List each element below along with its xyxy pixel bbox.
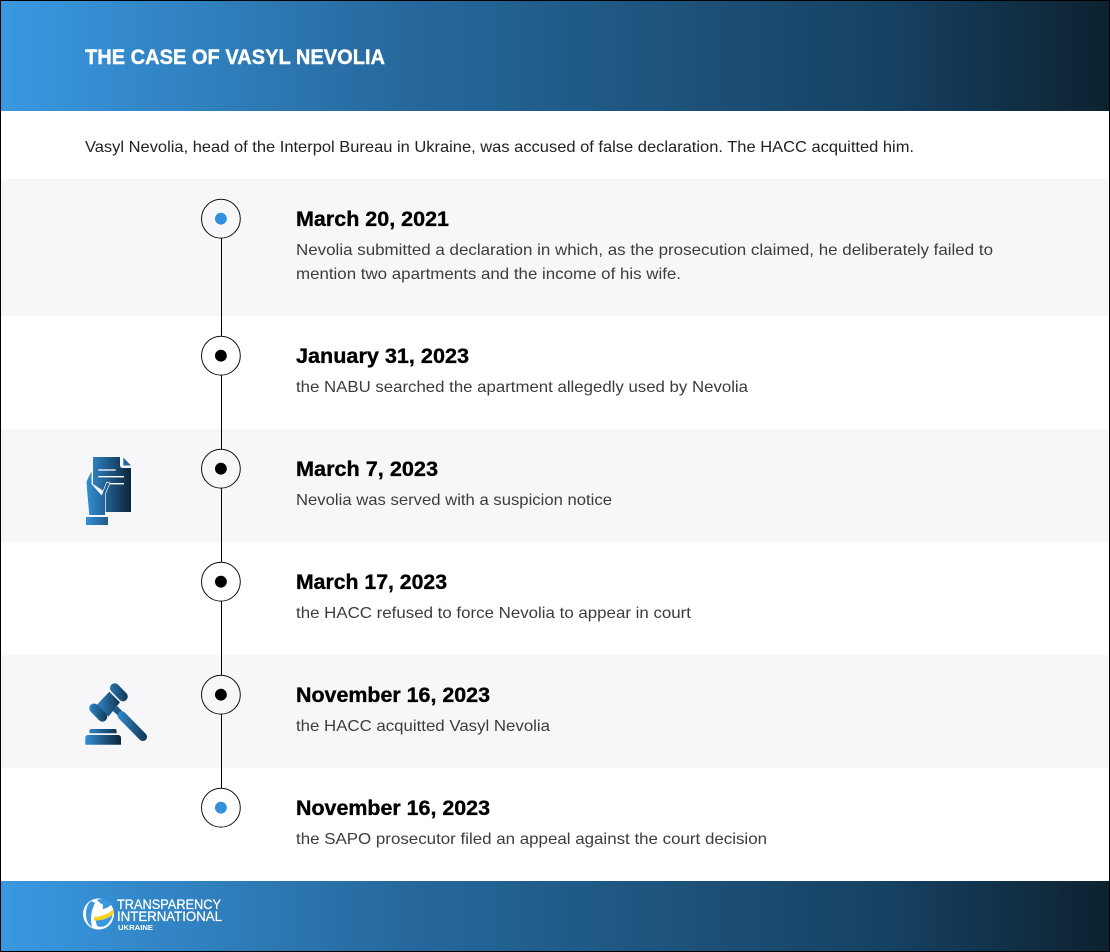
timeline marker 1	[202, 199, 240, 238]
event: November 16, 2023 appeal: November 16, 2023	[296, 797, 490, 820]
event: March 17, 2023: the HACC refused to force Nevolia to appear in court	[296, 605, 692, 622]
event: March 7, 2023: March 7, 2023	[296, 458, 438, 481]
logo: Transparency International Ukraine: UKRAINE	[118, 923, 153, 932]
event: March 20, 2021: March 20, 2021	[296, 208, 449, 231]
timeline marker 4	[202, 562, 240, 601]
event: November 16, 2023 appeal	[296, 797, 767, 848]
row background: November 16, 2023	[1, 655, 1109, 768]
icon: gavel	[85, 688, 143, 745]
event: March 17, 2023	[296, 571, 692, 622]
event: March 7, 2023: Nevolia was served with a suspicion notice	[296, 492, 612, 509]
event: November 16, 2023 acquittal: the HACC acquitted Vasyl Nevolia	[296, 718, 550, 735]
logo: Transparency International Ukraine	[83, 897, 222, 932]
timeline marker 6	[202, 788, 240, 827]
event: January 31, 2023: January 31, 2023	[296, 345, 469, 368]
event: November 16, 2023 acquittal: November 16, 2023	[296, 684, 490, 707]
event: March 17, 2023: March 17, 2023	[296, 571, 447, 594]
event: March 20, 2021	[296, 208, 993, 283]
logo: Transparency International Ukraine: TRANSPARENCY	[117, 897, 221, 912]
timeline marker 3	[202, 449, 240, 488]
event: November 16, 2023 acquittal	[296, 684, 550, 735]
event: March 7, 2023	[296, 458, 612, 509]
event: November 16, 2023 appeal: the SAPO prosecutor filed an appeal against the court decision	[296, 831, 767, 848]
logo: Transparency International Ukraine: INTERNATIONAL	[117, 909, 222, 924]
timeline marker 5	[202, 675, 240, 714]
event: January 31, 2023	[296, 345, 748, 396]
row background: March 20, 2021	[1, 179, 1109, 316]
icon: hand holding document	[86, 457, 131, 525]
footer band	[1, 881, 1109, 951]
timeline line	[221, 238, 222, 789]
intro text: Vasyl Nevolia, head of the Interpol Bureau in Ukraine, was accused of false declaration. The HACC acquitted him.	[85, 139, 914, 156]
row background: March 7, 2023	[1, 429, 1109, 542]
event: March 20, 2021: Nevolia submitted a declaration in which, as the prosecution claimed, he deliberately failed to	[296, 242, 993, 259]
event: January 31, 2023: the NABU searched the apartment allegedly used by Nevolia	[296, 379, 748, 396]
timeline marker 2	[202, 336, 240, 375]
title: THE CASE OF VASYL NEVOLIA	[85, 46, 385, 69]
header band	[1, 1, 1109, 111]
event: March 20, 2021: mention two apartments and the income of his wife.	[296, 266, 681, 283]
